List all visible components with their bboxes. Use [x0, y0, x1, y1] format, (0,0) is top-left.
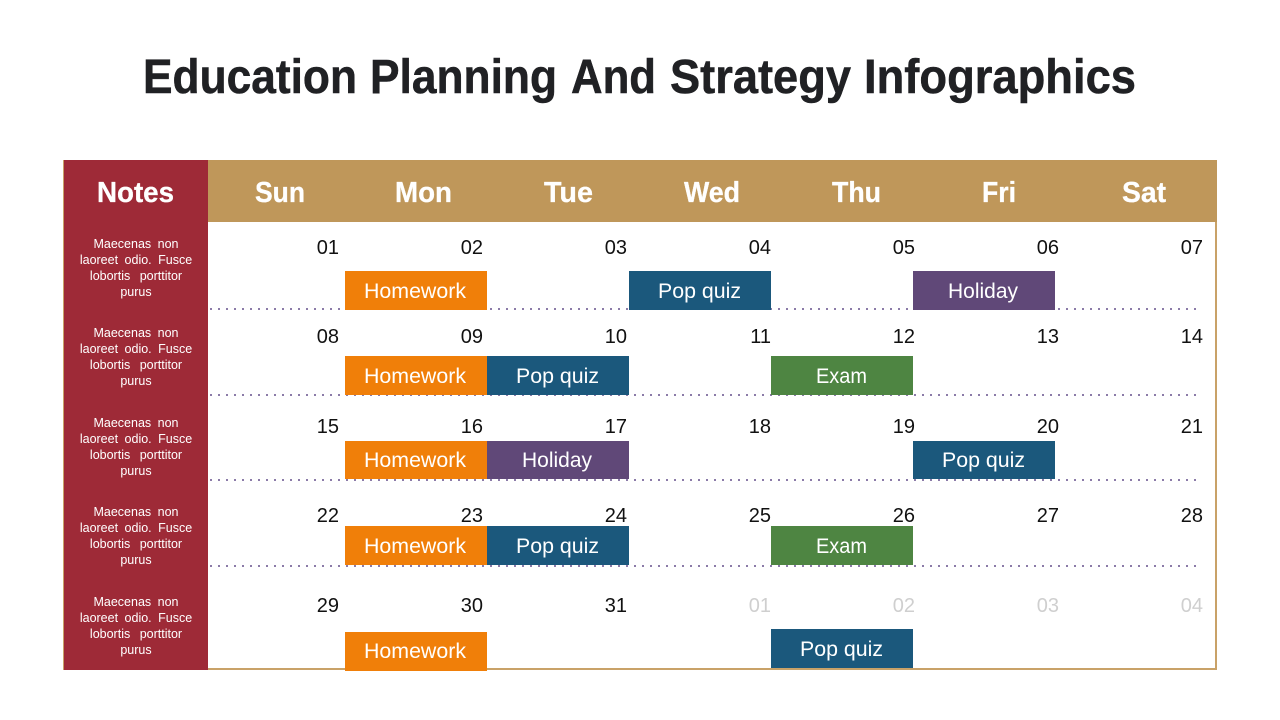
event: pop quiz week 2: Pop quiz — [516, 365, 599, 388]
panel: notes column: lobortis porttitor — [90, 269, 182, 283]
date numbers: 22 — [317, 505, 339, 527]
title: Education — [143, 51, 357, 104]
date numbers: 12 — [893, 326, 915, 348]
calendar frame — [64, 161, 1216, 669]
event: homework week 5: Homework — [364, 640, 467, 663]
panel: notes column — [64, 160, 208, 670]
date numbers: 05 — [893, 237, 915, 259]
event: holiday week 3 — [487, 441, 629, 479]
weekday header: Sun — [255, 177, 305, 209]
date numbers: 01 — [317, 237, 339, 259]
date numbers: 09 — [461, 326, 483, 348]
date numbers: 21 — [1181, 416, 1203, 438]
date numbers: 19 — [893, 416, 915, 438]
date numbers: 25 — [749, 505, 771, 527]
panel: notes column: laoreet odio. Fusce — [80, 611, 192, 625]
event: exam week 2 — [771, 356, 913, 395]
date numbers — [317, 237, 1203, 617]
title: Planning — [370, 51, 557, 104]
date numbers: 02 — [461, 237, 483, 259]
date numbers: 04 — [1181, 595, 1203, 617]
event: pop quiz week 4 — [487, 526, 629, 565]
event: holiday week 1: Holiday — [948, 280, 1018, 303]
date numbers: 03 — [1037, 595, 1059, 617]
event: holiday week 1 — [913, 271, 1055, 310]
event: pop quiz week 3: Pop quiz — [942, 449, 1025, 472]
date numbers: 07 — [1181, 237, 1203, 259]
event: homework week 4 — [345, 526, 487, 565]
date numbers: 11 — [750, 326, 771, 348]
event: holiday week 3: Holiday — [522, 449, 592, 472]
event: homework week 3: Homework — [364, 449, 467, 472]
panel: notes column: lobortis porttitor — [90, 358, 182, 372]
event: homework week 4: Homework — [364, 535, 467, 558]
event: pop quiz week 1 — [629, 271, 771, 310]
weekday header: Wed — [684, 177, 740, 209]
panel: notes column: Maecenas non — [93, 416, 179, 430]
date numbers: 03 — [605, 237, 627, 259]
event: homework week 1: Homework — [364, 280, 467, 303]
date numbers: 28 — [1181, 505, 1203, 527]
date numbers: 27 — [1037, 505, 1059, 527]
event: pop quiz week 3 — [913, 441, 1055, 479]
event: pop quiz week 5 — [771, 629, 913, 668]
panel: notes column: lobortis porttitor — [90, 627, 182, 641]
panel: notes column: laoreet odio. Fusce — [80, 342, 192, 356]
panel: notes column: Maecenas non — [93, 595, 179, 609]
event: pop quiz week 1: Pop quiz — [658, 280, 741, 303]
date numbers: 31 — [605, 595, 627, 617]
date numbers: 16 — [461, 416, 483, 438]
event: exam week 2: Exam — [816, 365, 867, 388]
panel: notes column: purus — [120, 643, 152, 657]
event: pop quiz week 5: Pop quiz — [800, 638, 883, 661]
date numbers: 20 — [1037, 416, 1059, 438]
date numbers: 08 — [317, 326, 339, 348]
title: Strategy — [670, 51, 851, 104]
panel: notes column: purus — [120, 374, 152, 388]
panel: notes column: Maecenas non — [93, 237, 179, 251]
title: And — [571, 51, 656, 104]
panel: notes column: laoreet odio. Fusce — [80, 432, 192, 446]
panel: notes column: laoreet odio. Fusce — [80, 253, 192, 267]
dotted row dividers — [210, 309, 1198, 566]
date numbers: 14 — [1181, 326, 1203, 348]
date numbers: 15 — [317, 416, 339, 438]
title: Infographics — [864, 51, 1136, 104]
panel: notes column: purus — [120, 553, 152, 567]
event: pop quiz week 4: Pop quiz — [516, 535, 599, 558]
event: exam week 4: Exam — [816, 535, 867, 558]
panel: notes column: purus — [120, 464, 152, 478]
date numbers: 04 — [749, 237, 771, 259]
event: homework week 2 — [345, 356, 487, 395]
date numbers: 02 — [893, 595, 915, 617]
panel: notes column: lobortis porttitor — [90, 537, 182, 551]
weekday header: Fri — [982, 177, 1016, 209]
event: pop quiz week 2 — [487, 356, 629, 395]
date numbers: 01 — [749, 595, 771, 617]
event: homework week 3 — [345, 441, 487, 479]
panel: notes column: Maecenas non — [93, 326, 179, 340]
date numbers: 13 — [1037, 326, 1059, 348]
date numbers: 23 — [461, 505, 483, 527]
weekday header: Mon — [395, 177, 452, 209]
panel: notes column: lobortis porttitor — [90, 448, 182, 462]
event: homework week 1 — [345, 271, 487, 310]
weekday header: Thu — [832, 177, 881, 209]
date numbers: 18 — [749, 416, 771, 438]
date numbers: 10 — [605, 326, 627, 348]
panel: notes column: laoreet odio. Fusce — [80, 521, 192, 535]
weekday header: Sat — [1122, 177, 1166, 209]
date numbers: 30 — [461, 595, 483, 617]
panel: notes column: purus — [120, 285, 152, 299]
event: exam week 4 — [771, 526, 913, 565]
event: homework week 5 — [345, 632, 487, 671]
date numbers: 24 — [605, 505, 627, 527]
event: homework week 2: Homework — [364, 365, 467, 388]
date numbers: 06 — [1037, 237, 1059, 259]
date numbers: 29 — [317, 595, 339, 617]
panel: notes column: Notes — [97, 177, 174, 209]
date numbers: 26 — [893, 505, 915, 527]
weekday header: Tue — [544, 177, 593, 209]
weekday header — [208, 160, 1217, 222]
panel: notes column: Maecenas non — [93, 505, 179, 519]
date numbers: 17 — [605, 416, 627, 438]
